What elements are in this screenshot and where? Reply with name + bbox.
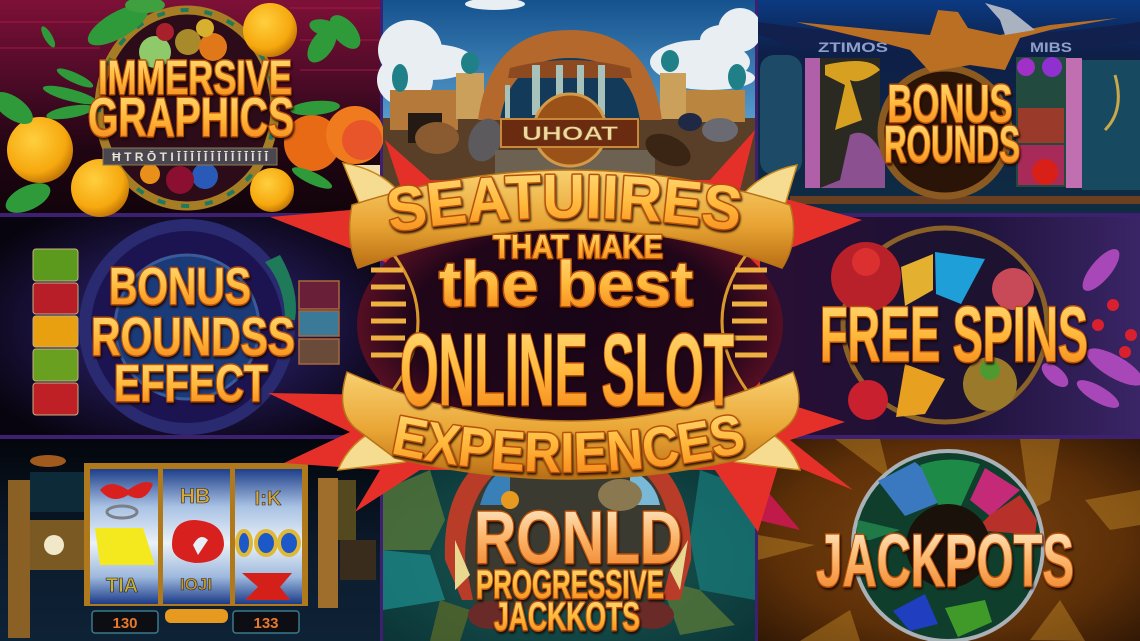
icon: symbol column left <box>33 249 78 415</box>
panel: golden arch scene <box>377 0 762 213</box>
gold inner arcs <box>386 245 754 400</box>
icon: shields and rubble <box>415 113 738 180</box>
icon: slot reels <box>84 463 308 606</box>
icon: slot reels: I:K <box>255 488 282 510</box>
heading: ronld progressive jackkots <box>474 496 682 639</box>
icon: golden arch building <box>390 30 746 143</box>
title: experiences: EXPERIENCES <box>392 414 748 477</box>
red spike accents <box>758 480 800 530</box>
panel: bonus rounds effect <box>0 217 380 435</box>
sun ray bars <box>371 270 767 355</box>
bottom ribbon <box>342 372 799 479</box>
heading: bonus rounds <box>884 74 1020 174</box>
icon: ornate arch <box>445 430 691 629</box>
central title emblem: ONLINE SLOT <box>400 313 734 427</box>
icon: slot reels: IOJI <box>180 575 212 594</box>
reel counters <box>92 609 299 633</box>
icon: green leaves <box>0 0 366 219</box>
draped banner: MIBS <box>1030 39 1072 55</box>
icon: slot reels: TIA <box>106 575 138 597</box>
clouds <box>377 0 762 106</box>
icon: golden winged creature <box>796 10 1118 72</box>
icon: slot machine frame <box>790 57 1140 204</box>
red starburst <box>268 130 862 532</box>
icon: fruit wheel <box>831 228 1047 422</box>
heading: ronld progressive jackkots: JACKKOTS <box>494 595 640 639</box>
panel: progressive jackpots <box>383 430 755 641</box>
heading: bonus rounds: BONUS <box>888 74 1012 134</box>
draped banner <box>758 22 1140 55</box>
small caption band: ĦTRŌTIĪĪĪĪĪĪĪĪĪĪĪĪĪĪ <box>112 150 269 164</box>
panel: immersive graphics <box>0 0 384 219</box>
heading: bonus roundss effect <box>91 258 295 413</box>
title: that make: THAT MAKE <box>493 228 663 265</box>
ground <box>383 118 755 213</box>
dark medallion <box>357 200 783 450</box>
panel: free spins <box>758 217 1140 435</box>
icon: slot reels: HB <box>180 485 210 508</box>
icon: jewelled wreath of fruit <box>99 10 275 206</box>
heading: ronld progressive jackkots: PROGRESSIVE <box>476 563 664 607</box>
rocks <box>383 470 755 641</box>
top ribbon wing tips <box>343 163 797 205</box>
heading: immersive graphics: GRAPHICS <box>88 86 294 148</box>
top ribbon <box>350 170 794 268</box>
icon: symbol column right <box>299 281 339 364</box>
title: the best: the best <box>439 248 693 320</box>
side scenery <box>760 55 1140 190</box>
title: seatuiires: SEATUIIRES <box>386 173 744 236</box>
reel counters: 130 <box>112 615 138 632</box>
panel: bonus rounds <box>758 0 1140 213</box>
icon: left machinery <box>8 455 376 638</box>
heading: bonus roundss effect: BONUS <box>109 258 251 316</box>
panel: slot reels <box>0 439 380 641</box>
icon: oranges and citrus slices <box>7 3 384 217</box>
reel counters: 133 <box>253 615 279 632</box>
badge label <box>501 94 638 166</box>
draped banner: ZTIMOS <box>818 39 888 55</box>
badge label: UHOAT <box>522 124 619 145</box>
heading: immersive graphics <box>88 52 294 148</box>
heading: bonus roundss effect: EFFECT <box>114 355 268 413</box>
icon: prize wheel <box>853 451 1043 641</box>
panel: jackpots <box>758 439 1140 641</box>
decorative swooshes and dots <box>1038 244 1140 413</box>
heading: immersive graphics: IMMERSIVE <box>98 52 292 105</box>
central title emblem <box>336 162 801 480</box>
icon: white feather wing <box>985 3 1035 35</box>
golden swirls <box>758 439 1140 641</box>
heading: ronld progressive jackkots: RONLD <box>474 496 682 579</box>
heading: bonus roundss effect: ROUNDSS <box>91 307 295 367</box>
heading: bonus rounds: ROUNDS <box>884 116 1020 174</box>
bottom ribbon wing tips <box>338 425 800 470</box>
